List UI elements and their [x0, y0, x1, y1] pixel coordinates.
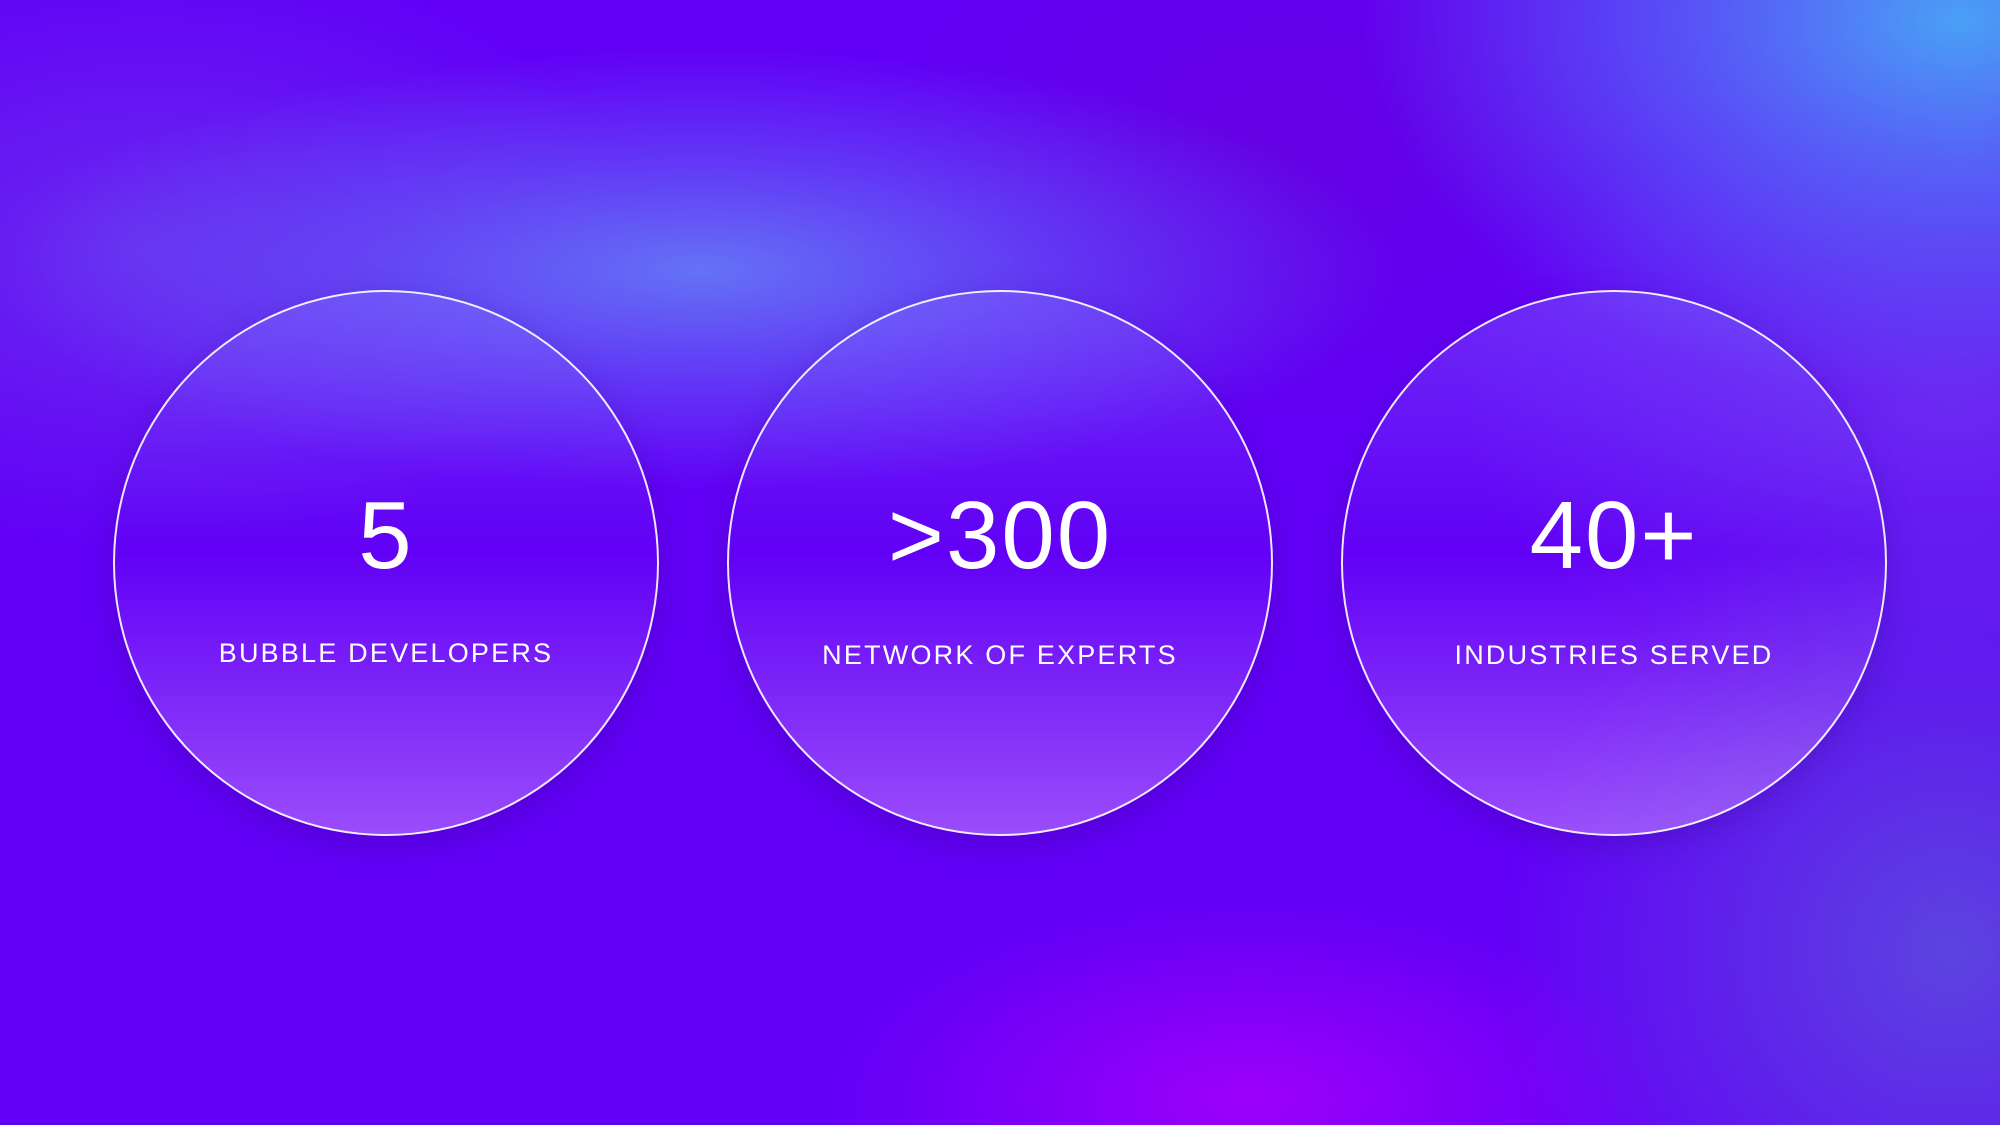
label: network of experts: NETWORK OF EXPERTS	[822, 640, 1178, 670]
circle: network of experts	[727, 290, 1273, 836]
label: bubble developers: BUBBLE DEVELOPERS	[219, 638, 553, 668]
number: 5: 5	[358, 482, 414, 589]
number: >300: >300	[888, 482, 1112, 589]
label: industries served: INDUSTRIES SERVED	[1455, 640, 1773, 670]
circle: bubble developers	[113, 290, 659, 836]
number: 40+: 40+	[1530, 482, 1698, 589]
circle: industries served	[1341, 290, 1887, 836]
